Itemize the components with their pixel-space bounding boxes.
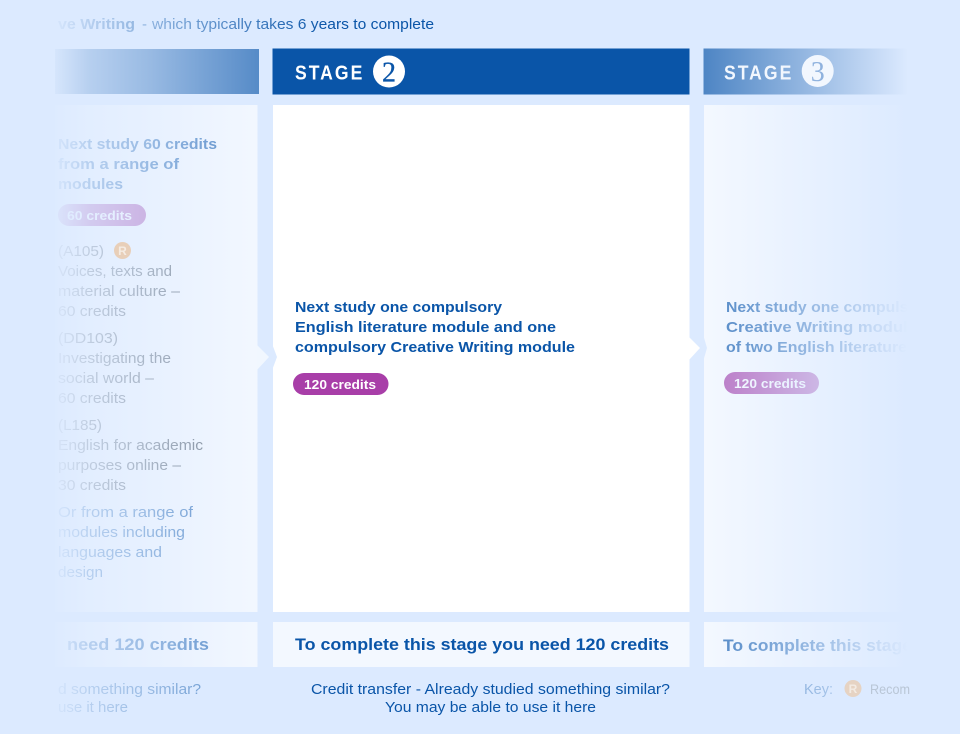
stage 2 completion box [273,622,690,667]
stage 1 footer text: use it here [58,699,128,716]
stage 1 header bar [55,49,259,94]
module DD103: (DD103) [58,330,118,347]
module DD103: 60 credits [58,390,126,407]
panel: stage 2 column [272,48,690,716]
module DD103: Investigating the [58,350,171,367]
module A105 [58,243,181,320]
stage 3 heading [726,299,934,356]
stage 2 heading [295,299,575,356]
stage 2 completion box: To complete this stage you need 120 credits [295,635,669,654]
key label: Key: [804,681,833,698]
module L185: English for academic [58,437,204,454]
other modules text: languages and [58,544,162,561]
module A105: (A105) [58,243,104,260]
module A105: material culture – [58,283,181,300]
key: recommended [844,680,910,697]
module DD103: social world – [58,370,155,387]
stage 3 heading: of two English literature [726,339,907,356]
module A105: Voices, texts and [58,263,172,280]
stage 1 heading: modules [58,176,123,193]
module L185: (L185) [58,417,102,434]
stage 2 credits pill [293,373,388,395]
stage 3 credits pill [724,372,819,394]
stage 2 heading: compulsory Creative Writing module [295,339,575,356]
other modules text: modules including [58,524,185,541]
credit transfer note [311,681,670,716]
stage 2 heading: Next study one compulsory [295,299,503,316]
stage 1 footer text: d something similar? [58,681,201,698]
module DD103 [58,330,171,407]
stage 1 body panel [55,105,258,612]
stage 1 completion box [55,622,258,667]
stage 2 credits pill: 120 credits [304,377,376,392]
stage 3 title [724,55,834,88]
stage 2 heading: English literature module and one [295,319,556,336]
stage 3 completion box [704,622,912,667]
stage 1 heading: from a range of [58,156,180,173]
stage 2 title: STAGE [295,61,362,84]
panel: stage 1 column [55,49,259,716]
stage 1 heading [58,136,217,193]
intro text: ve Writing [58,16,135,33]
stage 3 completion box: To complete this stage [723,636,912,655]
other modules text [58,504,194,581]
stage 1 completion box: need 120 credits [67,635,209,654]
intro text: - [142,16,147,33]
module A105: 60 credits [58,303,126,320]
panel: stage 3 column [704,48,934,698]
arrow: stage 2 to stage 3 [689,336,707,360]
module L185: purposes online – [58,457,182,474]
arrow: stage 1 to stage 2 [257,345,277,370]
module L185 [58,417,204,494]
credit transfer note: You may be able to use it here [385,699,596,716]
key: recommended: Recom [870,681,910,697]
intro text: which typically takes 6 years to complete [151,16,434,33]
other modules text: Or from a range of [58,504,194,521]
stage 3 heading: Creative Writing module [726,319,917,336]
stage 2 body panel [273,105,690,612]
stage 1 footer text [58,681,201,716]
stage 1 credits pill [58,204,146,226]
icon: recommended badge, stage 1: R [118,244,127,258]
stage 2 number badge: 2 [382,58,396,88]
module L185: 30 credits [58,477,126,494]
key: recommended: R [849,682,858,696]
stage 2 header bar [272,48,690,94]
other modules text: design [58,564,103,581]
stage 3 header bar [704,48,910,94]
stage 3 body panel [704,105,910,612]
stage 1 credits pill: 60 credits [67,208,132,223]
stage 3 credits pill: 120 credits [734,376,806,391]
icon: recommended badge, stage 1 [114,242,131,259]
stage 2 number badge [373,56,405,88]
stage 1 heading: Next study 60 credits [58,136,217,153]
stage 3 heading: Next study one compulsory [726,299,934,316]
stage 3 number badge: 3 [811,57,825,88]
credit transfer note: Credit transfer - Already studied something similar? [311,681,670,698]
stage 3 title: STAGE [724,61,791,84]
